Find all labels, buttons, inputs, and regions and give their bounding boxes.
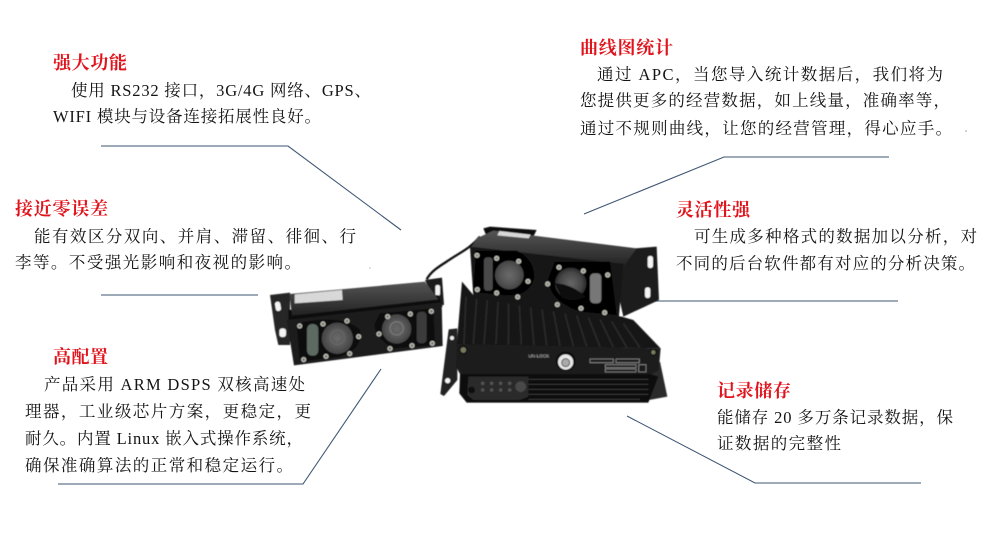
- left camera: [270, 278, 444, 365]
- body text: 可生成多种格式的数据加以分析，对: [694, 227, 977, 246]
- heading: 高配置: [53, 346, 108, 367]
- heading: 强大功能: [53, 52, 127, 73]
- cable: [427, 237, 480, 279]
- body text: 不同的后台软件都有对应的分析决策。: [676, 254, 975, 273]
- small specks: [369, 130, 967, 269]
- body text: 确保准确算法的正常和稳定运行。: [25, 456, 293, 475]
- corner screws: [460, 346, 656, 355]
- body text: [717, 408, 954, 453]
- SIM and SD labels: [590, 359, 646, 372]
- body text: [676, 227, 977, 273]
- connector line: record storage: [627, 416, 921, 483]
- body text: 使用 RS232 接口，3G/4G 网络、GPS、: [71, 81, 371, 100]
- panel: high configuration: [25, 346, 311, 475]
- panel: curve chart statistics: [580, 38, 952, 138]
- power lock: [556, 351, 576, 371]
- product photo: DVR and two cameras: [270, 227, 667, 403]
- lens screws: [475, 253, 610, 315]
- connector line: high flexibility: [655, 300, 898, 302]
- panel: record storage: [717, 380, 954, 453]
- DVR recorder unit: [440, 282, 667, 403]
- heading: 曲线图统计: [580, 38, 673, 58]
- lens screws: [298, 309, 434, 362]
- body text: 证数据的完整性: [717, 434, 842, 453]
- body text: 李等。不受强光影响和夜视的影响。: [15, 253, 301, 272]
- body text: [25, 375, 311, 475]
- body text: 耐久。内置 Linux 嵌入式操作系统，: [25, 429, 303, 448]
- LED indicators: [468, 381, 526, 393]
- body text: [580, 65, 952, 138]
- body text: 通过 APC，当您导入统计数据后，我们将为: [597, 65, 943, 84]
- body text: WIFI 模块与设备连接拓展性良好。: [53, 107, 321, 126]
- connector line: high configuration: [58, 369, 381, 484]
- body text: 您提供更多的经营数据，如上线量，准确率等，: [580, 91, 950, 110]
- unlock label: UN·LOCK: [528, 353, 550, 358]
- connector line: curve chart statistics: [584, 157, 889, 214]
- body text: [53, 81, 371, 126]
- panel: powerful functions: [53, 52, 371, 126]
- body text: [15, 227, 356, 272]
- heading: 灵活性强: [676, 199, 752, 220]
- heading: 接近零误差: [15, 199, 108, 219]
- connector line: powerful functions: [101, 146, 401, 230]
- heading: 记录储存: [717, 380, 791, 401]
- connector line: near zero error: [101, 294, 258, 296]
- panel: near zero error: [15, 199, 356, 272]
- body text: 理器，工业级芯片方案，更稳定，更: [25, 402, 311, 421]
- panel: high flexibility: [676, 199, 977, 273]
- body text: 通过不规则曲线，让您的经营管理，得心应手。: [580, 119, 952, 138]
- body text: 能有效区分双向、并肩、滞留、徘徊、行: [34, 227, 356, 246]
- body text: 能储存 20 多万条记录数据，保: [717, 408, 954, 427]
- top camera: [470, 227, 659, 320]
- body text: 产品采用 ARM DSPS 双核高速处: [44, 375, 306, 394]
